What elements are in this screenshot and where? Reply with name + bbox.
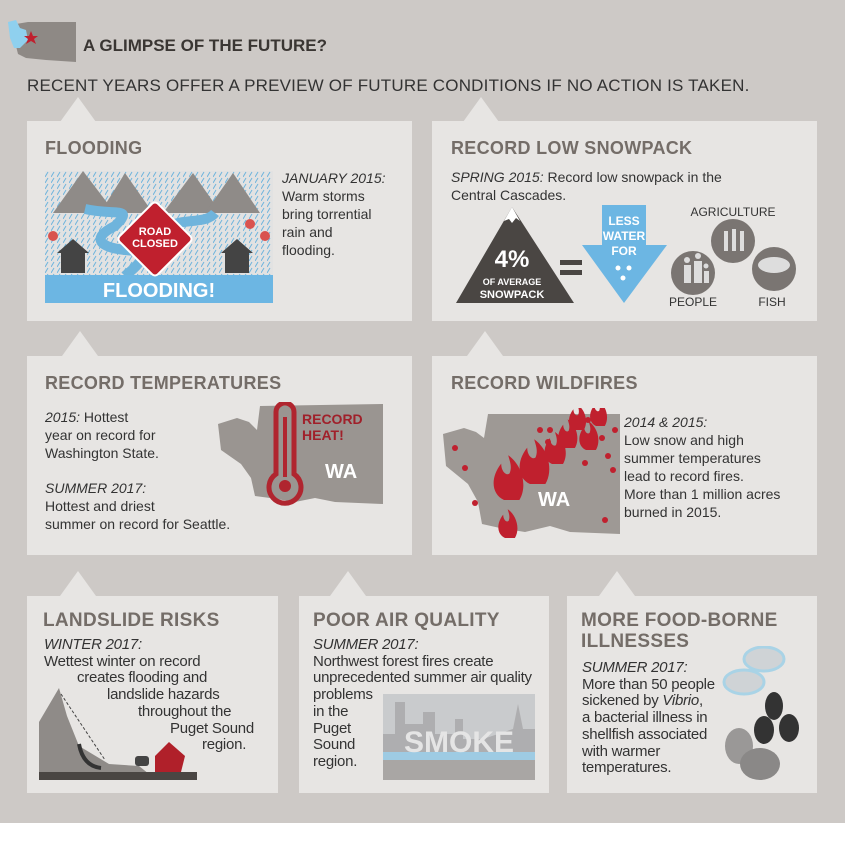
flood illustration: FLOODING! (103, 280, 215, 302)
text: summer 2017 air: region. (313, 753, 357, 770)
text: 2014 & 2015: Low snow and high (624, 432, 744, 448)
WA map with thermometer: WA (325, 461, 357, 483)
text: summer 2017: summer on record for Seattle. (45, 516, 230, 532)
snowpack infographic: FISH (758, 295, 786, 309)
heading: temperatures: RECORD TEMPERATURES (45, 373, 281, 393)
text: winter 2017: landslide hazards (107, 686, 220, 703)
text: summer 2017 vibrio (582, 659, 715, 776)
panel: poor air quality (299, 596, 549, 793)
WA map with fires: WA (538, 489, 570, 511)
WA map with fires (443, 408, 620, 538)
panel: record low snowpack (432, 121, 817, 321)
shellfish illustration (722, 646, 799, 780)
panel: landslide risks (27, 596, 278, 793)
text: 2014 & 2015: More than 1 million acres (624, 486, 780, 502)
snowpack infographic: SNOWPACK (480, 289, 544, 301)
subtitle: RECENT YEARS OFFER A PREVIEW OF FUTURE CONDITIONS IF NO ACTION IS TAKEN. (27, 76, 750, 95)
smoke skyline: SMOKE (404, 726, 514, 759)
text: summer 2017 vibrio: with warmer (582, 743, 660, 760)
panel: flooding (27, 121, 412, 321)
text: summer 2017 air: unprecedented summer air quality (313, 669, 532, 686)
text: 2014 & 2015: lead to record fires. (624, 468, 744, 484)
text: summer 2017 air: in the (313, 703, 348, 720)
heading: food-borne: ILLNESSES (581, 631, 689, 652)
text: 2014 & 2015: 2014 & 2015: (624, 414, 707, 430)
heading: landslide: LANDSLIDE RISKS (43, 610, 220, 631)
heading: flooding: FLOODING (45, 138, 142, 158)
icon: washington map with star (8, 20, 76, 62)
text: 2014 & 2015: burned in 2015. (624, 504, 721, 520)
text: summer 2017 vibrio: shellfish associated (582, 726, 707, 743)
text: winter 2017 (44, 636, 254, 753)
text: january 2015: bring torrential (282, 206, 372, 222)
snowpack infographic: 4% (495, 246, 529, 273)
heading: food-borne: MORE FOOD-BORNE (581, 610, 778, 631)
text: january 2015: JANUARY 2015: (282, 170, 386, 186)
flood illustration: CLOSED (132, 238, 178, 250)
text: summer 2017 air: Puget (313, 720, 351, 737)
snowpack infographic: AGRICULTURE (690, 205, 776, 219)
heading: wildfires: RECORD WILDFIRES (451, 373, 638, 393)
text: summer 2017 air (313, 636, 532, 770)
panel: food-borne illnesses (567, 596, 817, 793)
snowpack infographic: LESS (608, 214, 640, 228)
text: winter 2017: WINTER 2017: (44, 636, 142, 653)
text: january 2015 (282, 170, 386, 258)
text: spring 2015: Central Cascades. (451, 187, 566, 203)
snowpack infographic: WATER (603, 229, 646, 243)
panel: record wildfires (432, 356, 817, 555)
flood illustration (45, 171, 273, 303)
panel: record temperatures (27, 356, 412, 555)
text: summer 2017 air: Sound (313, 736, 355, 753)
WA map with thermometer: HEAT! (302, 427, 344, 443)
text: spring 2015: SPRING 2015: Record low snowpack in the (451, 169, 722, 185)
text: summer 2017 air: problems (313, 686, 373, 703)
text: winter 2017: Wettest winter on record (44, 653, 200, 670)
snowpack infographic: FOR (611, 244, 637, 258)
heading: air quality: POOR AIR QUALITY (313, 610, 500, 631)
text: summer 2017 (45, 480, 230, 532)
text: winter 2017: region. (202, 736, 246, 753)
text: summer 2017 vibrio: temperatures. (582, 759, 671, 776)
text: summer 2017 vibrio: More than 50 people (582, 676, 715, 693)
heading: food-borne (581, 610, 778, 652)
text: summer 2017 vibrio: SUMMER 2017: (582, 659, 687, 676)
smoke skyline (383, 694, 535, 780)
text: 2015 hottest year (44, 409, 159, 461)
WA map with thermometer (218, 402, 383, 506)
text: summer 2017: Hottest and driest (45, 498, 155, 514)
text: spring 2015 (451, 169, 722, 203)
WA map with thermometer: RECORD (302, 411, 363, 427)
snowpack infographic: PEOPLE (669, 295, 717, 309)
text: summer 2017 vibrio: a bacterial illness in (582, 709, 707, 726)
snowpack infographic (456, 205, 796, 309)
text: 2015 hottest year: year on record for (45, 427, 156, 443)
text: january 2015: Warm storms (282, 188, 365, 204)
text: summer 2017 air: Northwest forest fires create (313, 653, 493, 670)
text: january 2015: rain and (282, 224, 333, 240)
text: january 2015: flooding. (282, 242, 335, 258)
text: 2015 hottest year: Washington State. (45, 445, 159, 461)
text: winter 2017: throughout the (138, 703, 231, 720)
text: summer 2017 air: SUMMER 2017: (313, 636, 418, 653)
text: winter 2017: creates flooding and (77, 669, 207, 686)
heading: snowpack: RECORD LOW SNOWPACK (451, 138, 692, 158)
flood illustration: ROAD (139, 226, 171, 238)
text: 2014 & 2015 (624, 414, 780, 520)
landslide illustration (39, 688, 197, 780)
text: summer 2017: SUMMER 2017: (45, 480, 146, 496)
snowpack infographic: OF AVERAGE (483, 277, 541, 287)
text: 2014 & 2015: summer temperatures (624, 450, 761, 466)
title: A GLIMPSE OF THE FUTURE? (83, 36, 327, 55)
text: summer 2017 vibrio: sickened by Vibrio, (582, 692, 703, 709)
text: 2015 hottest year: 2015: Hottest (45, 409, 128, 425)
text: winter 2017: Puget Sound (170, 720, 254, 737)
